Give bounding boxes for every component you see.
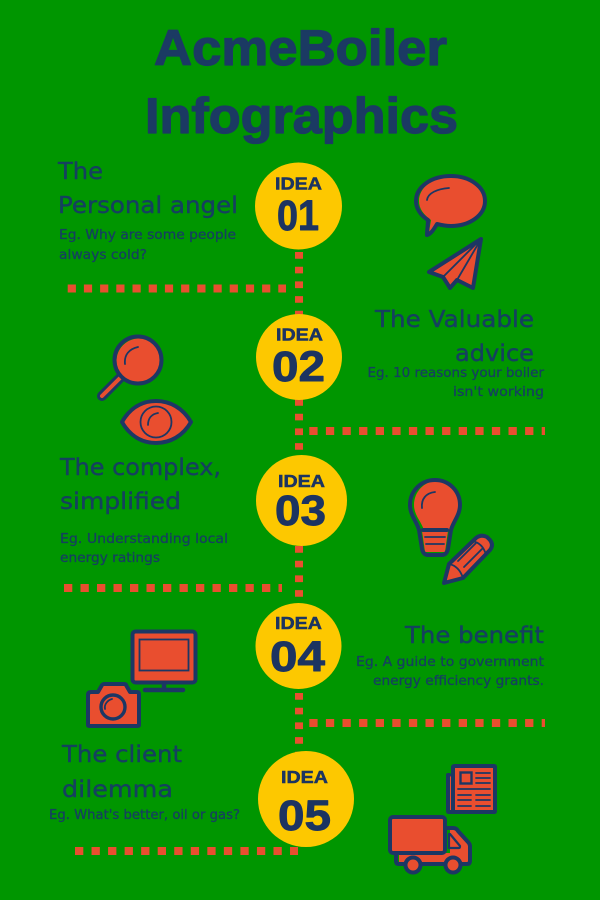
idea badge 04 bbox=[256, 603, 342, 689]
idea badge 02: 02 bbox=[272, 343, 325, 391]
title: Infographics bbox=[145, 87, 458, 144]
icon: light bulb bbox=[410, 480, 461, 555]
text block: the valuable advice bbox=[368, 307, 544, 400]
icon: delivery truck bbox=[390, 817, 470, 872]
text block: the benefit: The benefit bbox=[404, 623, 544, 649]
idea badge 03: IDEA bbox=[278, 471, 325, 491]
text block: the benefit bbox=[356, 623, 544, 689]
text block: the client dilemma bbox=[49, 742, 240, 823]
idea badge 01: IDEA bbox=[275, 174, 322, 194]
title bbox=[145, 19, 458, 144]
text block: the valuable advice: Eg. 10 reasons your boiler bbox=[368, 365, 544, 381]
idea badge 02 bbox=[256, 314, 342, 400]
text block: the complex, simplified: The complex, bbox=[59, 455, 221, 481]
icon: speech bubble bbox=[416, 176, 485, 235]
text block: the client dilemma: dilemma bbox=[62, 777, 173, 803]
idea badge 05: IDEA bbox=[281, 767, 328, 787]
icon: paper plane bbox=[429, 239, 481, 288]
title: AcmeBoiler bbox=[154, 19, 447, 76]
text block: the personal angel: Eg. Why are some people bbox=[59, 227, 236, 243]
text block: the client dilemma: The client bbox=[61, 742, 182, 768]
text block: the personal angel: The bbox=[57, 159, 103, 185]
idea badge 02: IDEA bbox=[276, 324, 323, 344]
text block: the complex, simplified bbox=[59, 455, 228, 566]
text block: the personal angel: Personal angel bbox=[58, 193, 238, 219]
idea badge 03: 03 bbox=[275, 487, 326, 535]
icon: newspaper bbox=[448, 766, 495, 812]
idea badge 05 bbox=[258, 751, 354, 847]
text block: the client dilemma: Eg. What's better, oil or gas? bbox=[49, 807, 240, 823]
text block: the complex, simplified: simplified bbox=[60, 489, 181, 515]
idea badge 01 bbox=[255, 162, 342, 250]
text block: the personal angel bbox=[57, 159, 238, 263]
text block: the benefit: energy efficiency grants. bbox=[373, 673, 544, 689]
idea badge 01: 01 bbox=[277, 192, 319, 240]
text block: the personal angel: always cold? bbox=[59, 247, 147, 263]
timeline: dotted connectors bbox=[64, 252, 545, 851]
icon: pencil bbox=[444, 535, 493, 583]
text block: the valuable advice: advice bbox=[455, 341, 534, 367]
idea badge 05: 05 bbox=[278, 792, 331, 840]
idea badge 04: IDEA bbox=[275, 613, 322, 633]
icon: eye bbox=[122, 401, 191, 443]
text block: the benefit: Eg. A guide to government bbox=[356, 654, 544, 670]
icon: monitor bbox=[132, 632, 196, 690]
text block: the valuable advice: isn't working bbox=[453, 384, 544, 400]
icon: camera bbox=[88, 684, 139, 726]
icon: magnifying glass bbox=[102, 336, 162, 396]
idea badge 04: 04 bbox=[270, 633, 325, 681]
idea badge 03 bbox=[256, 455, 347, 546]
text block: the complex, simplified: Eg. Understanding local bbox=[60, 531, 228, 547]
text block: the complex, simplified: energy ratings bbox=[60, 550, 160, 566]
text block: the valuable advice: The Valuable bbox=[374, 307, 534, 333]
